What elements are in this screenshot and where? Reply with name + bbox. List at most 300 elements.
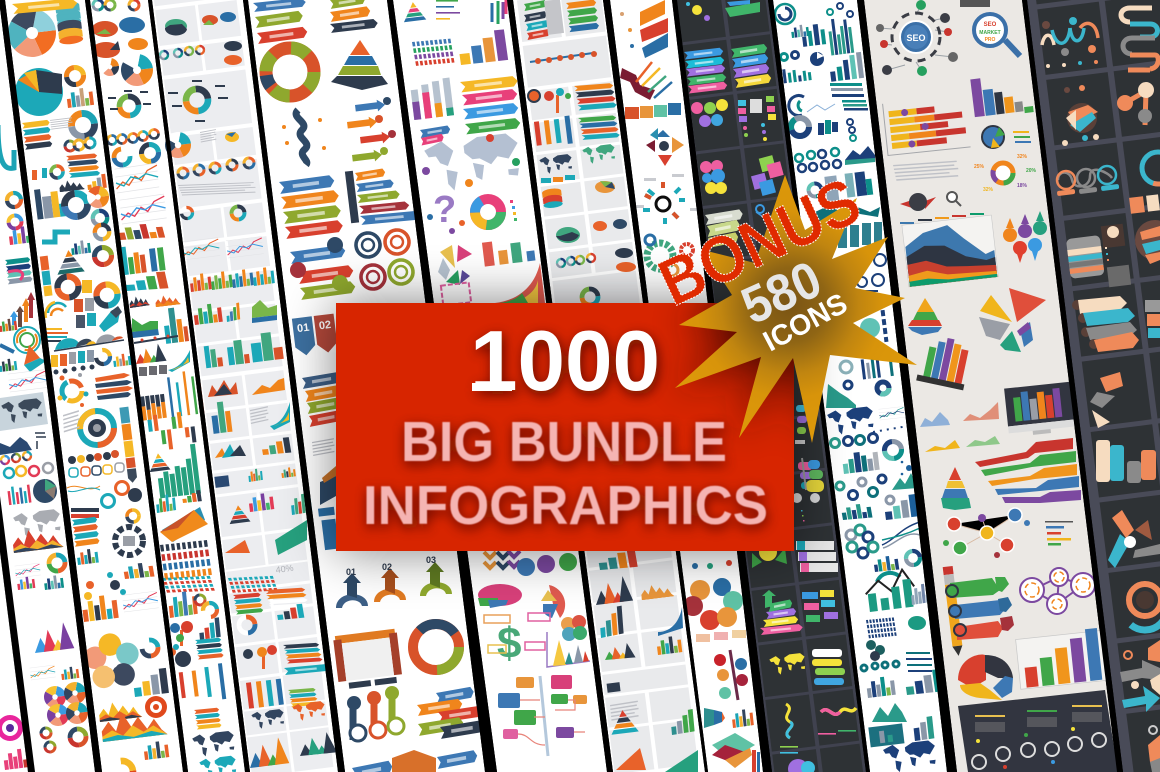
C ring bbox=[789, 96, 804, 116]
panel drop shadow bbox=[336, 303, 794, 551]
people rows bbox=[412, 39, 454, 66]
vertical lines bbox=[492, 0, 506, 24]
node chain bbox=[1117, 82, 1154, 125]
pills rows bbox=[578, 115, 620, 140]
orange shield bbox=[392, 750, 436, 772]
people row bbox=[228, 576, 278, 593]
tiles bbox=[35, 433, 46, 449]
labels: 01 bbox=[346, 567, 356, 577]
tag rows bbox=[696, 630, 746, 642]
arrow icons bbox=[336, 573, 368, 608]
rings pair bbox=[92, 210, 110, 240]
bars bbox=[873, 555, 899, 572]
list rows bbox=[72, 517, 100, 547]
title shadows: INFOGRAPHICS bbox=[364, 478, 769, 540]
bars bbox=[842, 450, 880, 474]
small rings bbox=[64, 137, 96, 152]
ovals bbox=[224, 41, 242, 65]
top cubes bbox=[12, 0, 78, 14]
semi ring bbox=[877, 573, 900, 582]
icon row bbox=[68, 450, 119, 464]
icons bbox=[861, 661, 899, 671]
text block bbox=[178, 182, 258, 195]
rings fan bbox=[238, 616, 256, 634]
panel: strip 4 bbox=[248, 0, 486, 772]
peak chart red bbox=[208, 380, 238, 397]
pipe number rings bbox=[1057, 166, 1116, 189]
colored cylinders bbox=[260, 437, 291, 455]
ribbon blue bbox=[253, 0, 306, 12]
dark list bars bbox=[71, 508, 99, 518]
text list bbox=[250, 406, 269, 424]
people icons bbox=[838, 222, 882, 248]
magnifier bbox=[974, 14, 1020, 56]
3D ovals bbox=[92, 17, 148, 58]
icon people bbox=[32, 168, 47, 180]
pencil ribbons bbox=[946, 577, 1014, 640]
top chips bbox=[126, 509, 140, 523]
mag icon bbox=[947, 192, 961, 206]
small bars bbox=[123, 272, 168, 291]
text block bbox=[893, 161, 960, 181]
pinwheel bbox=[128, 61, 146, 79]
triangle chart bbox=[616, 748, 646, 770]
tag rows bbox=[812, 649, 845, 685]
panel: strip 5 bbox=[393, 0, 607, 772]
area dark bbox=[59, 179, 85, 192]
big pie bbox=[19, 20, 45, 46]
gauge bbox=[141, 639, 159, 657]
flower diagram bbox=[81, 630, 142, 690]
dark bars bbox=[866, 676, 896, 698]
3D arrows bbox=[916, 333, 973, 390]
dense bars bbox=[827, 17, 854, 55]
ribbon olive bbox=[255, 10, 303, 28]
navy map bbox=[883, 740, 938, 772]
side pills below star bbox=[795, 405, 807, 444]
pinwheel bbox=[171, 138, 185, 152]
mini colour map bbox=[769, 653, 806, 676]
world map bbox=[423, 132, 522, 194]
small bars bbox=[0, 318, 17, 332]
numbered banners: 02 bbox=[318, 319, 332, 332]
pie fan bbox=[92, 191, 104, 203]
pink bars bbox=[3, 748, 33, 770]
ring bbox=[840, 361, 852, 389]
ovals bbox=[593, 219, 627, 231]
labels: 03 bbox=[426, 555, 436, 565]
tree bbox=[243, 645, 277, 669]
pyramid numbered bbox=[331, 40, 388, 90]
stair blocks dark bbox=[110, 306, 122, 318]
box bars bbox=[904, 669, 943, 695]
footer rings bbox=[972, 733, 1106, 769]
small area charts bbox=[920, 402, 1000, 452]
area charts bbox=[593, 575, 633, 605]
small area bbox=[602, 642, 636, 660]
teal bars bbox=[782, 66, 812, 83]
top right tag bbox=[725, 0, 760, 17]
pills bbox=[574, 83, 617, 110]
3D donut bbox=[958, 655, 1013, 700]
tiles four bbox=[74, 298, 96, 328]
percent labels: 20% bbox=[1026, 168, 1037, 174]
SEO wheel bbox=[876, 0, 958, 76]
gear donut bbox=[63, 192, 89, 218]
bars bbox=[8, 225, 34, 245]
ring pair bbox=[113, 144, 159, 166]
wave bbox=[821, 708, 856, 714]
bars chart bbox=[1015, 628, 1106, 689]
bars row bbox=[189, 266, 275, 292]
small pie bbox=[105, 62, 115, 72]
3D steps bbox=[330, 0, 378, 33]
area orange bbox=[252, 378, 285, 395]
bars bbox=[66, 87, 94, 108]
gear red bbox=[666, 244, 693, 276]
bullet list bbox=[1105, 247, 1109, 261]
semi ring bbox=[95, 283, 119, 307]
teal pair bars bbox=[841, 503, 873, 520]
rising arrows bbox=[10, 292, 35, 327]
text lines bbox=[50, 117, 73, 130]
donut bbox=[877, 382, 889, 394]
caption dots bbox=[801, 510, 804, 522]
venn circles bbox=[561, 615, 587, 641]
tree bbox=[528, 88, 571, 113]
cake bbox=[556, 227, 580, 243]
donut percent bbox=[993, 163, 1013, 183]
mini bars bbox=[656, 635, 682, 655]
line chart 2 bbox=[119, 194, 167, 224]
question mark: ? bbox=[433, 189, 456, 231]
rings bbox=[830, 434, 878, 448]
screen bbox=[868, 723, 905, 747]
3D stack bbox=[320, 466, 336, 505]
line charts bbox=[181, 238, 220, 260]
pyramid bbox=[609, 708, 639, 735]
bars bbox=[670, 709, 695, 735]
panel: strip 0 far left bbox=[0, 8, 95, 772]
area legend bbox=[900, 213, 984, 224]
bars bbox=[43, 575, 64, 590]
magnifier: MARKET bbox=[979, 30, 1001, 36]
ring bbox=[66, 67, 84, 85]
ring bbox=[8, 215, 22, 229]
tree bbox=[170, 621, 193, 646]
mini bars bbox=[123, 562, 155, 579]
center donut bbox=[185, 88, 209, 112]
ball bands bbox=[1135, 220, 1160, 264]
ring bbox=[775, 4, 795, 24]
people rows 2 bbox=[162, 576, 215, 593]
donut orbit bbox=[62, 381, 82, 401]
arc ring bbox=[14, 327, 40, 353]
flow lines bbox=[518, 700, 585, 745]
tab bars bbox=[132, 668, 169, 697]
dial bbox=[756, 205, 777, 228]
tall navy bars bbox=[845, 171, 873, 198]
curve chart bbox=[270, 402, 290, 430]
chevrons bbox=[457, 29, 508, 65]
text blocks bbox=[610, 701, 639, 721]
big ring bbox=[80, 411, 114, 445]
color tiles bbox=[284, 664, 330, 675]
dark map bbox=[192, 730, 236, 758]
ribbon rows bbox=[279, 175, 343, 239]
rings bbox=[194, 594, 218, 618]
percent labels: 25% bbox=[974, 164, 985, 170]
grey panel grid bbox=[517, 0, 698, 772]
cylinder bars bbox=[162, 306, 189, 344]
peak area bbox=[892, 473, 918, 490]
gauges bbox=[844, 254, 886, 287]
bars top left bbox=[193, 303, 223, 325]
ribbons bbox=[233, 593, 264, 614]
line panel bbox=[8, 370, 47, 392]
top pie icons bbox=[827, 3, 853, 17]
numbered ribbons bbox=[302, 371, 345, 427]
wave nodes bbox=[1042, 17, 1098, 68]
title line two: INFOGRAPHICS bbox=[363, 474, 768, 536]
side tags bbox=[802, 590, 838, 622]
list bars bbox=[684, 47, 728, 93]
diagonal arrows bbox=[636, 62, 672, 98]
peak colours bbox=[133, 343, 167, 364]
orbit arrows bbox=[1066, 103, 1098, 133]
pin bubbles bbox=[100, 480, 142, 509]
color squares bbox=[625, 103, 681, 119]
hanging bars bbox=[147, 410, 197, 452]
rings grid bbox=[795, 148, 841, 172]
red title panel bbox=[336, 303, 794, 551]
percent labels: 32% bbox=[1017, 154, 1028, 160]
title shadows: 1000 bbox=[472, 318, 662, 413]
text bbox=[200, 129, 217, 142]
mixed bars bbox=[61, 666, 79, 680]
cross arrows bbox=[1120, 640, 1160, 712]
small ring bbox=[886, 496, 894, 504]
small pyramid bbox=[402, 1, 426, 22]
bonus star badge bbox=[675, 175, 917, 443]
cube chart bbox=[86, 174, 107, 190]
chart: rainbow U bands bbox=[0, 125, 14, 168]
area band bbox=[252, 300, 277, 323]
line mini bbox=[879, 407, 905, 420]
donut bbox=[6, 192, 22, 208]
chevrons lower bbox=[484, 551, 520, 568]
grey panel grid bbox=[151, 0, 333, 772]
donut bbox=[581, 288, 599, 306]
dollar icon: $ bbox=[497, 619, 521, 668]
arc rings bbox=[46, 302, 66, 318]
side labels bbox=[63, 410, 80, 432]
lower tag rows bbox=[796, 541, 838, 572]
arrow tags bbox=[1072, 296, 1139, 352]
percent labels: 18% bbox=[1017, 183, 1028, 189]
mini bars lower bbox=[290, 493, 313, 515]
top rings bbox=[92, 0, 140, 11]
nodes cluster bbox=[168, 644, 191, 667]
magnifier: PRO bbox=[985, 37, 996, 43]
timeline bbox=[530, 51, 597, 64]
title line one: BIG BUNDLE bbox=[401, 410, 727, 474]
pyramid bbox=[228, 504, 251, 524]
teal area bbox=[872, 703, 907, 722]
cubes under bbox=[692, 560, 732, 569]
hbars bbox=[436, 0, 460, 20]
teal list bbox=[842, 100, 868, 110]
green stair bbox=[665, 750, 698, 772]
thermometer bars bbox=[178, 663, 226, 704]
long arrows bbox=[95, 373, 133, 400]
legend bbox=[510, 200, 517, 221]
oval pie bbox=[595, 181, 615, 193]
title number: 1000 bbox=[470, 314, 660, 409]
arrow ring bbox=[643, 182, 685, 224]
pyramid bbox=[55, 248, 85, 275]
mini bars group bbox=[181, 490, 202, 503]
target bbox=[0, 715, 23, 741]
curvy pipes bbox=[8, 271, 23, 280]
bars dark bbox=[0, 358, 17, 372]
rising wave bbox=[495, 263, 545, 303]
tabs bbox=[1057, 184, 1119, 196]
vertical column ribbon bbox=[40, 256, 53, 296]
text column bbox=[544, 0, 564, 35]
line bbox=[30, 665, 56, 680]
triangle orange bbox=[225, 540, 250, 553]
area small bbox=[845, 146, 875, 165]
tab row bbox=[265, 588, 309, 609]
flow axis bbox=[540, 676, 548, 756]
ring row bbox=[160, 46, 204, 59]
green bars bbox=[154, 444, 201, 498]
area chart orange bbox=[155, 294, 181, 307]
domes bbox=[54, 334, 124, 351]
arrow tags bbox=[705, 209, 743, 248]
qr tile bbox=[1107, 265, 1131, 287]
map pins bbox=[422, 134, 520, 187]
big ring bbox=[413, 624, 459, 670]
snake bbox=[786, 704, 792, 738]
peak colours bbox=[215, 444, 246, 458]
snake timeline bbox=[296, 110, 307, 165]
580 number: 580 bbox=[733, 250, 830, 336]
dark map bbox=[539, 154, 573, 175]
bars cylinder bbox=[599, 606, 624, 638]
labels bbox=[620, 12, 634, 48]
chain circles bbox=[836, 475, 886, 500]
four pies bbox=[49, 687, 83, 721]
star node bbox=[686, 2, 710, 21]
donut bbox=[808, 183, 822, 197]
blue dotted wave bbox=[0, 345, 14, 352]
panel: strip 10 cream bbox=[864, 0, 1118, 772]
target bbox=[145, 696, 167, 718]
gear teal bbox=[645, 235, 673, 269]
numbered banners: 01 bbox=[296, 322, 310, 335]
pink table bbox=[441, 282, 471, 306]
teardrops bbox=[691, 99, 728, 127]
percent: 40% bbox=[275, 563, 294, 575]
small bars bbox=[113, 353, 131, 367]
stacked bars bbox=[140, 394, 167, 421]
area chart navy red bbox=[129, 295, 150, 308]
BONUS label: BONUS bbox=[648, 163, 871, 320]
small donuts bbox=[40, 727, 87, 753]
numbered banners bbox=[292, 314, 338, 356]
stack cylinders bbox=[1096, 440, 1156, 483]
orange arrow bbox=[374, 568, 406, 602]
pie exploded bbox=[541, 585, 565, 618]
small bars bbox=[910, 583, 933, 605]
snake arrows bbox=[1121, 8, 1158, 70]
donut row bbox=[1, 452, 31, 464]
timeline dots bbox=[282, 118, 326, 150]
wavy lines bbox=[67, 486, 100, 492]
gauge lower bbox=[110, 760, 134, 772]
small pie bbox=[982, 126, 1005, 148]
small bars bbox=[791, 24, 809, 38]
thermometer icons bbox=[51, 350, 94, 374]
pyramid bbox=[908, 298, 942, 335]
ring arrows bbox=[181, 207, 193, 219]
world map panel bbox=[0, 392, 48, 431]
star shade on panel bbox=[669, 303, 794, 441]
dots list bbox=[743, 123, 767, 141]
panel: strip 7 bbox=[610, 0, 763, 772]
timeline bubbles bbox=[714, 650, 748, 700]
stairs 3D bbox=[620, 68, 655, 100]
area chart bbox=[98, 699, 142, 722]
badge bbox=[900, 193, 936, 211]
dark map bbox=[251, 709, 285, 730]
pills bbox=[283, 643, 323, 663]
top ribbons bbox=[524, 0, 550, 40]
ribbons bbox=[5, 257, 33, 284]
labels bbox=[108, 90, 151, 110]
network bbox=[943, 508, 1030, 558]
navy bars bbox=[830, 83, 864, 97]
bars bbox=[883, 494, 918, 520]
small ovals bbox=[202, 12, 236, 25]
3D bars bbox=[704, 708, 725, 728]
grey icons bbox=[792, 493, 820, 503]
central donut bbox=[118, 95, 140, 117]
line chart bbox=[15, 563, 41, 578]
wavy lines bbox=[882, 522, 920, 548]
horizontal bar chart bbox=[883, 95, 971, 156]
cylinders bbox=[55, 1, 82, 27]
thin dark tile bbox=[214, 475, 230, 488]
area chart large bbox=[100, 707, 168, 742]
triangle arrows bbox=[1108, 510, 1160, 568]
circle of segments bbox=[56, 275, 80, 299]
area pyramid bbox=[24, 345, 46, 372]
orange mountain bbox=[160, 507, 208, 542]
people rows bbox=[866, 617, 897, 638]
green stair bbox=[275, 520, 307, 555]
bars bbox=[276, 604, 304, 620]
dark map bbox=[827, 406, 875, 436]
donut large bbox=[884, 441, 902, 459]
ring gauge bbox=[1123, 584, 1160, 630]
monitor bbox=[1004, 382, 1075, 437]
dollar labels bbox=[484, 613, 550, 653]
tilted cards bbox=[747, 154, 788, 198]
bars bbox=[143, 740, 169, 760]
